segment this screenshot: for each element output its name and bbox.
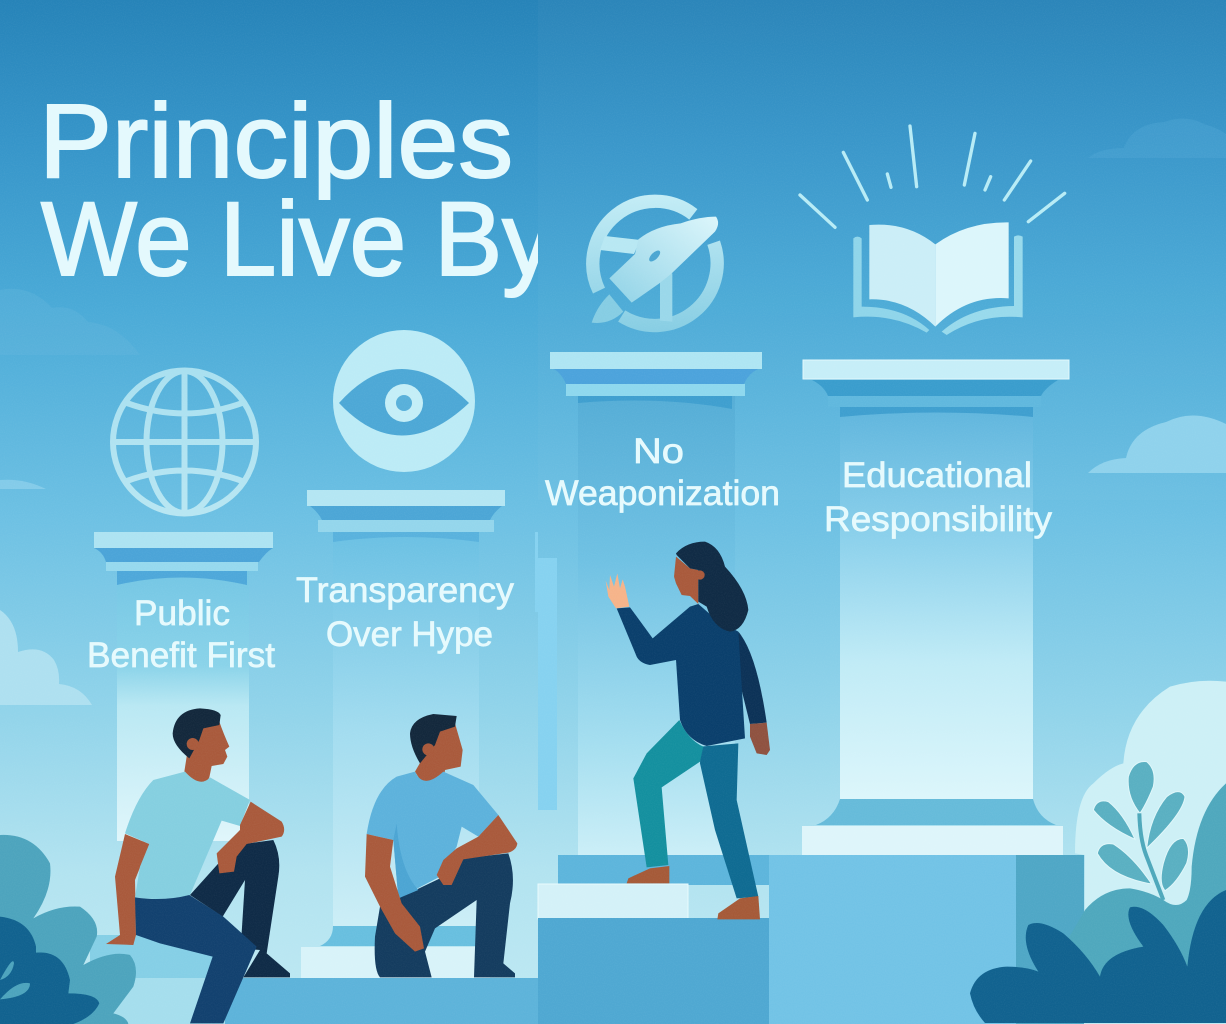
pillar 1: public benefit first — [87, 532, 275, 978]
pillar 3 label: No — [633, 432, 684, 471]
pillar 2 label — [296, 571, 515, 654]
pillar 1 label: Public — [134, 594, 230, 633]
icon: eye — [333, 330, 475, 472]
title: We Live By — [41, 181, 553, 298]
pillar 3: no weaponization — [538, 352, 780, 919]
icon: open book with rays — [800, 126, 1065, 335]
pillar 4 label: Responsibility — [824, 500, 1053, 539]
pillar 1 label: Benefit First — [87, 636, 275, 675]
ground steps — [110, 855, 1084, 1024]
title — [40, 100, 538, 298]
pillar 3 label — [545, 432, 780, 513]
foliage: left bushes — [0, 835, 136, 1024]
foliage: right bushes — [970, 681, 1226, 1023]
pillar 3 label: Weaponization — [545, 474, 780, 513]
background clouds — [0, 118, 1226, 705]
pillar 4 label: Educational — [842, 456, 1032, 495]
pillar 4: educational responsibility — [802, 360, 1069, 855]
icon: globe — [113, 370, 256, 514]
pillar 4 label — [824, 456, 1053, 539]
title: Principles — [39, 83, 513, 200]
light strip at the image seam — [535, 532, 557, 810]
icon: crossed-out rocket — [592, 201, 718, 326]
pillar 2 label: Over Hype — [326, 615, 493, 654]
pillar 2: transparency over hype — [296, 490, 515, 978]
figure: woman climbing steps — [606, 542, 770, 919]
pillar 2 label: Transparency — [296, 571, 515, 610]
figure: seated man, left — [106, 708, 290, 1023]
pillar 1 label — [87, 594, 275, 675]
figure: crouching man, right — [365, 714, 517, 977]
